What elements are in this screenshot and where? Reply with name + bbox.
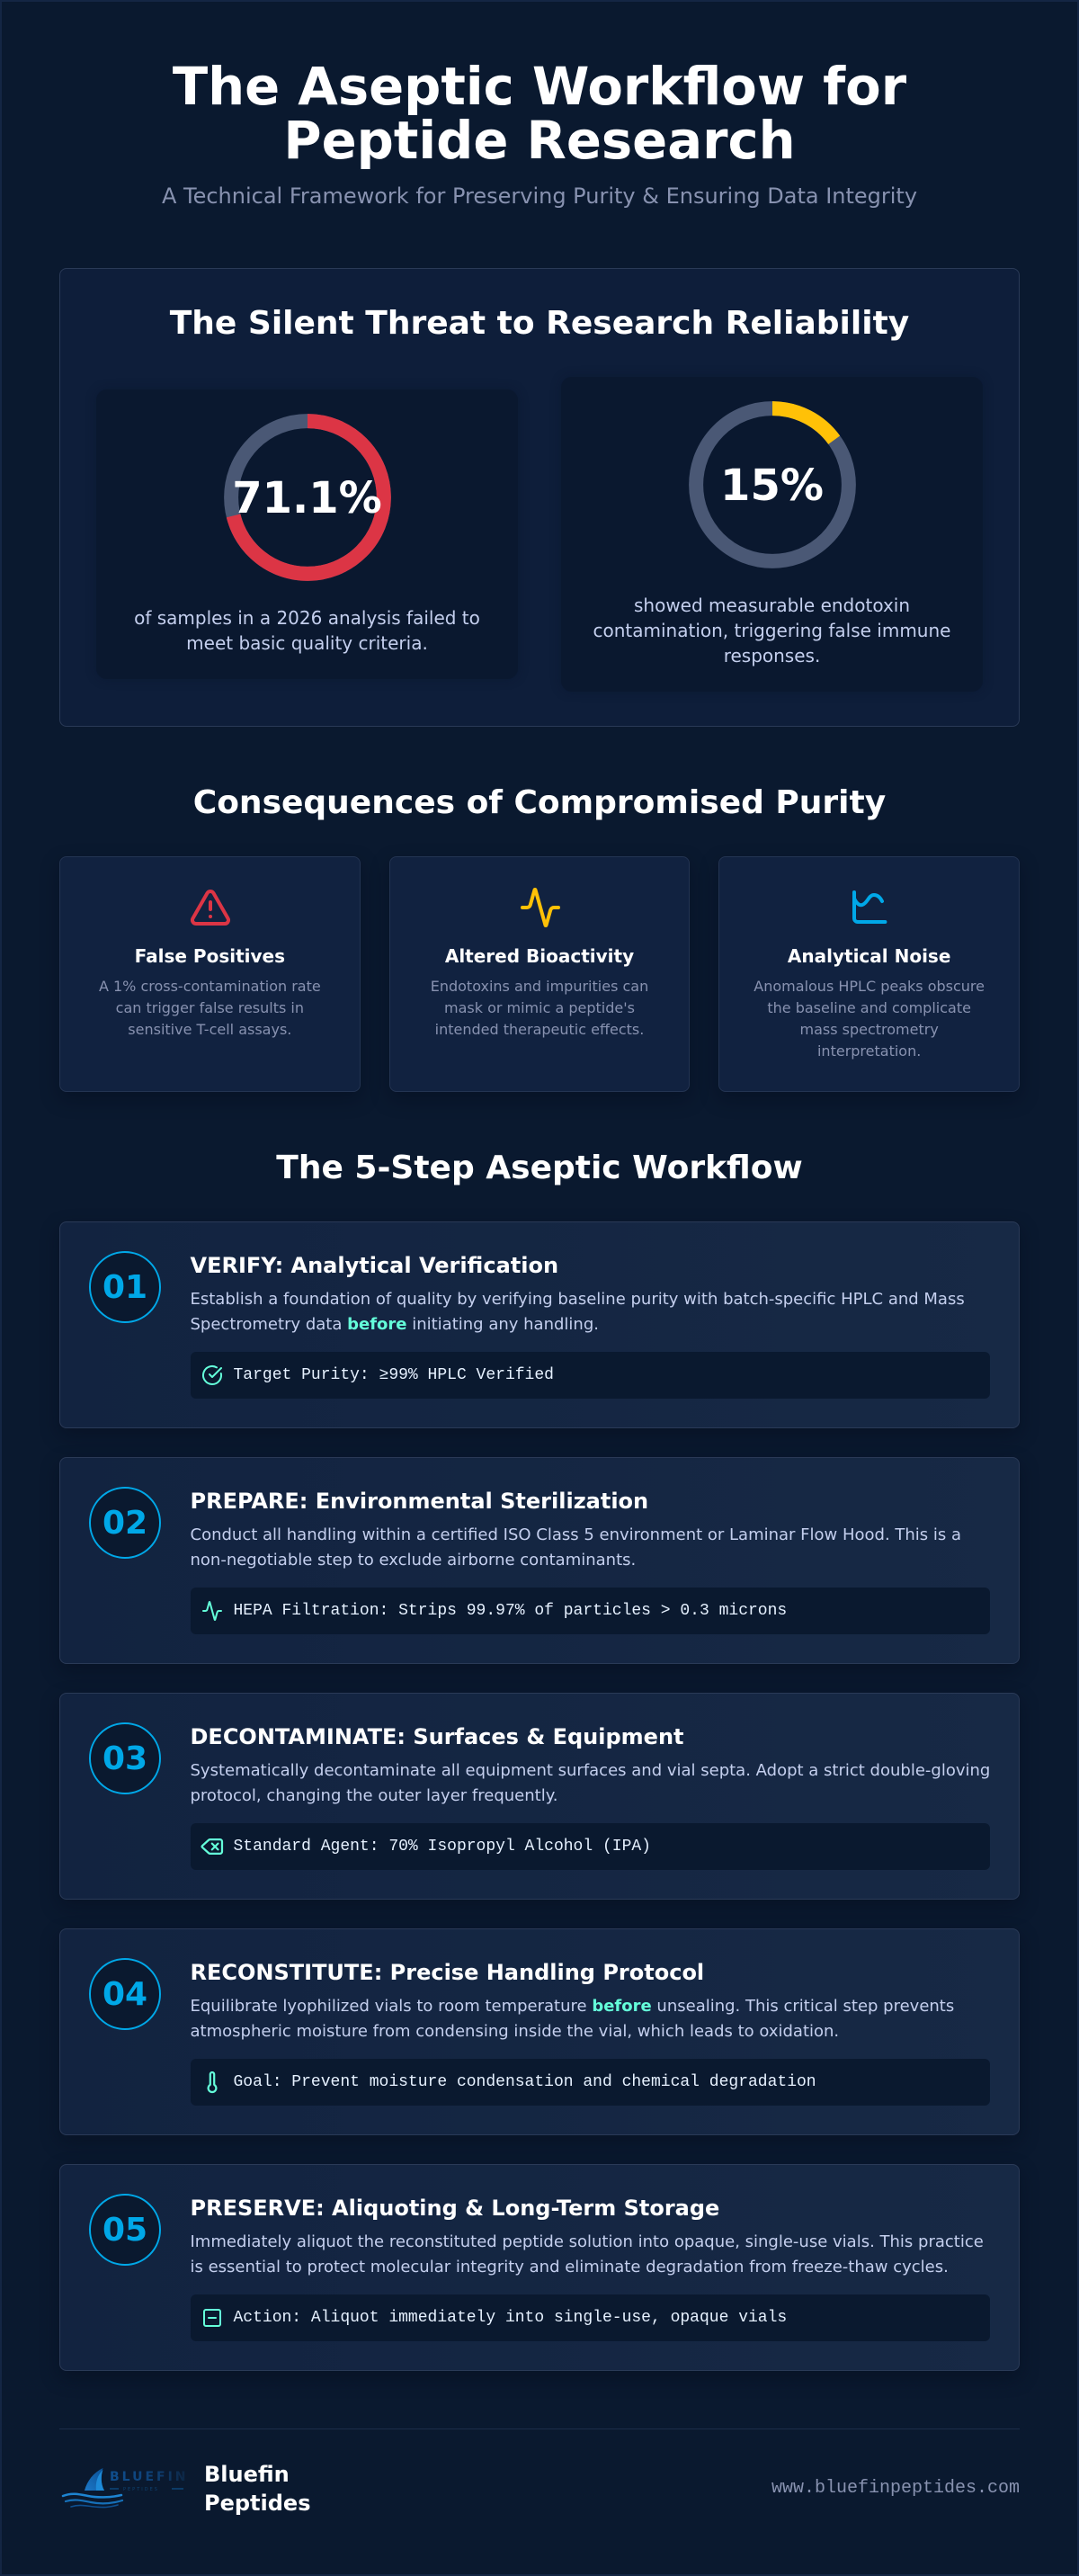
step description: Immediately aliquot the reconstituted peptide solution into opaque, single-use vials. This practice <box>191 2232 984 2251</box>
step description: Systematically decontaminate all equipment surfaces and vial septa. Adopt a strict double-gloving <box>191 1761 990 1780</box>
icon: circle check <box>201 1365 223 1385</box>
stat description: endotoxin <box>593 595 950 666</box>
step description: Establish a foundation of quality by verifying baseline purity with batch-specific HPLC and Mass <box>191 1290 965 1309</box>
callout: action <box>191 2294 990 2341</box>
step description: non-negotiable step to exclude airborne contaminants. <box>191 1551 636 1570</box>
brand name <box>204 2462 311 2516</box>
step number 05: 05 <box>103 2212 147 2249</box>
heading: 5-step workflow: The 5-Step Aseptic Workflow <box>276 1149 803 1186</box>
stat description: failed samples: meet basic quality criteria. <box>186 632 428 654</box>
icon: thermometer <box>207 2071 218 2094</box>
stat card: 71.1% <box>96 389 518 679</box>
stat description: failed samples <box>134 607 480 654</box>
callout: HEPA filtration <box>191 1588 990 1634</box>
callout text: Action: Aliquot immediately into single-use, opaque vials <box>234 2309 787 2327</box>
step number 02: 02 <box>103 1505 147 1542</box>
logo: Bluefin Peptides: PEPTIDES <box>123 2487 159 2492</box>
icon: activity pulse <box>521 888 560 927</box>
step number 04: 04 <box>103 1976 147 2013</box>
step number 03 <box>89 1722 161 1794</box>
step 03: decontaminate <box>59 1693 1020 1900</box>
step description: Conduct all handling within a certified ISO Class 5 environment or Laminar Flow Hood. This is a <box>191 1525 961 1544</box>
callout text: HEPA Filtration: Strips 99.97% of particles > 0.3 microns <box>234 1602 787 1620</box>
stat description: endotoxin: showed measurable endotoxin <box>634 595 910 616</box>
footer <box>59 2428 1020 2536</box>
stat value: 71.1%: 71.1% <box>232 473 382 523</box>
heading: consequences: Consequences of Compromised Purity <box>193 784 886 821</box>
subtitle: A Technical Framework for Preserving Purity & Ensuring Data Integrity <box>162 183 917 209</box>
logo: Bluefin Peptides <box>61 2468 189 2508</box>
icon: activity <box>202 1601 222 1621</box>
card title: Analytical Noise <box>788 945 950 967</box>
step number 02 <box>89 1487 161 1559</box>
card: false positives <box>59 856 361 1092</box>
donut chart: 15% <box>689 401 856 568</box>
step description: Equilibrate lyophilized vials to room temperature before unsealing. This critical step prevents <box>191 1997 954 2016</box>
step number 03: 03 <box>103 1740 147 1777</box>
title: The Aseptic Workflow for <box>173 57 906 117</box>
icon: spline chart <box>852 890 887 924</box>
step description <box>191 1761 990 1805</box>
step description <box>191 1997 954 2041</box>
step title: DECONTAMINATE: Surfaces & Equipment <box>191 1724 684 1749</box>
stat card: 15% <box>561 377 983 692</box>
website url: www.bluefinpeptides.com <box>771 2478 1020 2499</box>
step number 01: 01 <box>103 1269 147 1306</box>
brand name: Bluefin <box>204 2462 290 2487</box>
step title: RECONSTITUTE: Precise Handling Protocol <box>191 1960 704 1985</box>
callout text: Goal: Prevent moisture condensation and chemical degradation <box>234 2073 816 2091</box>
card text: Endotoxins and impurities can mask or mimic a peptide's intended therapeutic effects. <box>431 978 648 1038</box>
step number 01 <box>89 1251 161 1323</box>
step 05: preserve <box>59 2164 1020 2371</box>
step number 04 <box>89 1958 161 2030</box>
step description <box>191 1290 965 1334</box>
title <box>173 57 906 171</box>
title: Peptide Research <box>283 111 796 171</box>
icon: warning triangle <box>191 890 230 926</box>
logo: Bluefin Peptides: BLUEFIN <box>110 2470 189 2484</box>
card title: False Positives <box>135 945 285 967</box>
callout: goal <box>191 2059 990 2106</box>
card text: Anomalous HPLC peaks obscure the baseline and complicate mass spectrometry interpretation. <box>754 978 985 1060</box>
donut chart: 71.1% <box>224 414 391 581</box>
heading: silent threat: The Silent Threat to Research Reliability <box>170 305 909 342</box>
callout text: Standard Agent: 70% Isopropyl Alcohol (IPA) <box>234 1838 651 1856</box>
icon: square minus <box>203 2309 221 2327</box>
step 04: reconstitute <box>59 1928 1020 2135</box>
callout text: Target Purity: ≥99% HPLC Verified <box>234 1366 554 1384</box>
step description <box>191 1525 961 1570</box>
step title: PRESERVE: Aliquoting & Long-Term Storage <box>191 2196 719 2221</box>
step description <box>191 2232 984 2276</box>
callout: target purity <box>191 1352 990 1399</box>
card text: A 1% cross-contamination rate can trigger false results in sensitive T-cell assays. <box>99 978 321 1038</box>
step description: protocol, changing the outer layer frequently. <box>191 1786 558 1805</box>
step description: Spectrometry data before initiating any handling. <box>191 1315 599 1334</box>
icon: eraser delete <box>201 1838 223 1855</box>
callout: standard agent <box>191 1823 990 1870</box>
step 01: verify <box>59 1221 1020 1428</box>
card title: Altered Bioactivity <box>445 945 634 967</box>
step title: PREPARE: Environmental Sterilization <box>191 1489 648 1514</box>
brand name: Peptides <box>204 2491 311 2516</box>
stat description: failed samples: of samples in a 2026 analysis failed to <box>134 607 480 629</box>
step number 05 <box>89 2194 161 2266</box>
step title: VERIFY: Analytical Verification <box>191 1253 558 1278</box>
step description: is essential to protect molecular integrity and eliminate degradation from freeze-thaw cycles. <box>191 2258 949 2276</box>
stat description: endotoxin: contamination, triggering false immune <box>593 620 950 641</box>
card: altered bioactivity <box>389 856 690 1092</box>
panel: the silent threat <box>59 268 1020 727</box>
card: analytical noise <box>718 856 1020 1092</box>
step 02: prepare <box>59 1457 1020 1664</box>
step description: atmospheric moisture from condensing inside the vial, which leads to oxidation. <box>191 2022 839 2041</box>
stat value: 15%: 15% <box>720 461 824 511</box>
stat description: endotoxin: responses. <box>724 645 820 666</box>
